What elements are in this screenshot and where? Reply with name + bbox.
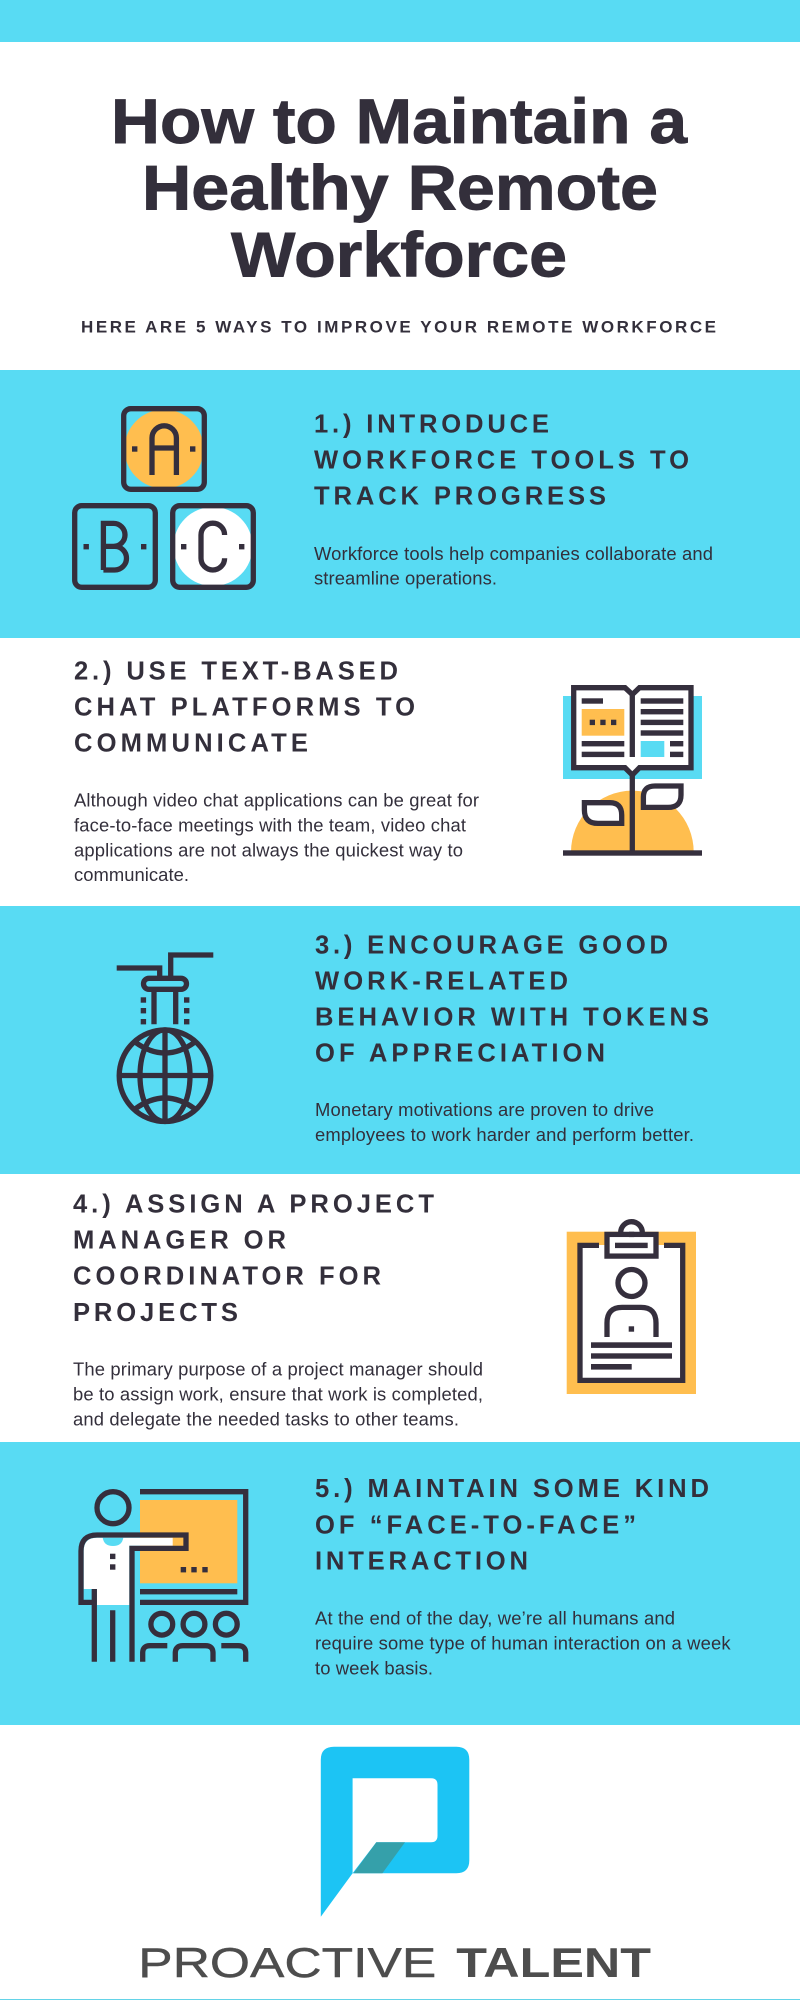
body text 2: Although video chat applications can be great for <box>74 789 479 810</box>
logo wordmark: TALENT <box>456 1939 651 1986</box>
body text 5: At the end of the day, we’re all humans and <box>315 1607 675 1628</box>
icon: book plant <box>563 688 702 856</box>
body text 2 <box>74 789 479 885</box>
panel: section 3 <box>0 906 800 1174</box>
heading 3 <box>315 932 709 1067</box>
heading 5: INTERACTION <box>315 1547 528 1575</box>
subtitle: HERE ARE 5 WAYS TO IMPROVE YOUR REMOTE WORKFORCE <box>81 317 716 336</box>
heading 4 <box>73 1190 434 1327</box>
body text 5: require some type of human interaction on a week <box>315 1632 731 1653</box>
heading 2: COMMUNICATE <box>74 729 308 757</box>
body text 2: applications are not always the quickest way to <box>74 839 463 860</box>
heading 2: 2.) USE TEXT-BASED <box>74 657 398 685</box>
heading 3: WORK-RELATED <box>315 968 568 996</box>
heading 1: 1.) INTRODUCE <box>314 411 549 439</box>
icon: globe with plug <box>117 955 213 1121</box>
panel: section 5 <box>0 1442 800 1725</box>
title: Healthy Remote <box>142 154 658 224</box>
body text 4: The primary purpose of a project manager should <box>73 1358 483 1379</box>
heading 4: PROJECTS <box>73 1299 238 1327</box>
body text 5 <box>315 1607 731 1678</box>
body text 2: communicate. <box>74 864 189 885</box>
heading 2: CHAT PLATFORMS TO <box>74 693 415 721</box>
heading 4: COORDINATOR FOR <box>73 1263 381 1291</box>
icon: clipboard with person <box>567 1222 696 1394</box>
body text 1: streamline operations. <box>314 568 497 588</box>
body text 4: be to assign work, ensure that work is completed, <box>73 1383 483 1404</box>
heading 4: 4.) ASSIGN A PROJECT <box>73 1190 434 1218</box>
heading 5 <box>315 1475 709 1575</box>
body text 1 <box>314 543 713 588</box>
panel: section 2 <box>74 657 702 885</box>
body text 5: to week basis. <box>315 1657 433 1678</box>
heading 5: OF “FACE-TO-FACE” <box>315 1511 636 1539</box>
heading 5: 5.) MAINTAIN SOME KIND <box>315 1475 709 1503</box>
heading 4: MANAGER OR <box>73 1227 286 1255</box>
bottom edge line <box>0 1999 800 2000</box>
logo mark <box>321 1747 469 1917</box>
title: How to Maintain a <box>111 87 688 157</box>
panel: section 1 <box>0 370 800 638</box>
body text 4 <box>73 1358 483 1429</box>
heading 3: BEHAVIOR WITH TOKENS <box>315 1003 709 1031</box>
logo wordmark <box>138 1939 651 1986</box>
body text 3: employees to work harder and perform better. <box>315 1124 694 1145</box>
heading 1: WORKFORCE TOOLS TO <box>314 447 689 475</box>
body text 2: face-to-face meetings with the team, video chat <box>74 814 466 835</box>
heading 3: OF APPRECIATION <box>315 1039 605 1067</box>
icon: ABC blocks <box>75 409 253 587</box>
body text 4: and delegate the needed tasks to other teams. <box>73 1408 459 1429</box>
logo: Proactive Talent <box>138 1747 651 1986</box>
heading 1 <box>314 411 689 511</box>
title <box>111 87 688 290</box>
logo wordmark: PROACTIVE <box>138 1939 436 1986</box>
title: Workforce <box>231 220 567 290</box>
panel: section 4 <box>73 1190 696 1429</box>
heading 2 <box>74 657 415 757</box>
heading 1: TRACK PROGRESS <box>314 483 606 511</box>
body text 3: Monetary motivations are proven to drive <box>315 1099 654 1120</box>
top band <box>0 0 800 42</box>
heading 3: 3.) ENCOURAGE GOOD <box>315 932 668 960</box>
body text 1: Workforce tools help companies collaborate and <box>314 543 713 564</box>
body text 3 <box>315 1099 694 1145</box>
icon: presenter with audience <box>81 1492 246 1662</box>
